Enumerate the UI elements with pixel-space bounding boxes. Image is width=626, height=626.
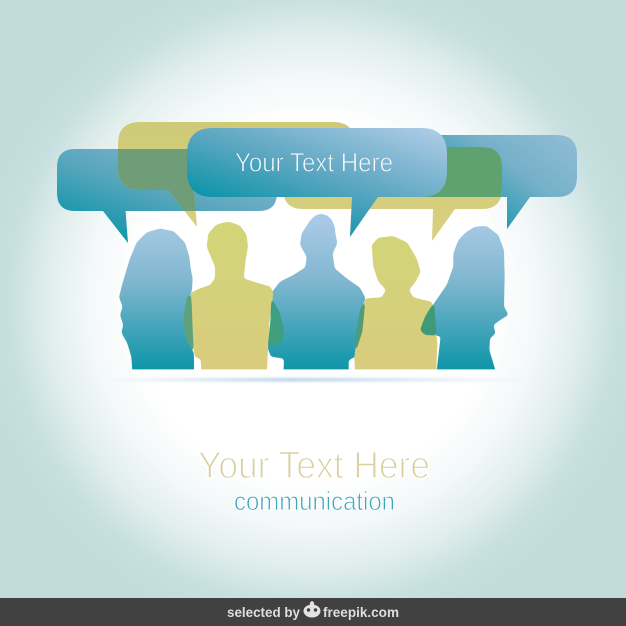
speech bubble: left blue (57, 149, 277, 243)
overlap: arm 3 (354, 303, 365, 348)
icon: freepik logo (304, 601, 320, 618)
footer text: selected by: selected by (227, 604, 300, 620)
overlap: right bubbles (422, 147, 502, 197)
speech bubble: back olive right (283, 147, 502, 241)
person: woman left (119, 228, 194, 377)
footer bar (0, 598, 626, 626)
person: woman olive (354, 236, 437, 377)
bubble text: Your Text Here (235, 148, 393, 178)
ground shadow (100, 378, 530, 382)
speech bubble: main front (187, 128, 447, 237)
footer text: freepik.com: freepik.com (323, 604, 399, 620)
person: man centre blue (267, 214, 366, 377)
person: woman right (432, 226, 508, 370)
overlap: arm 4 (420, 305, 436, 336)
speech bubble: right blue (380, 135, 577, 229)
people silhouettes (119, 214, 509, 377)
overlap: left bubbles (118, 149, 196, 211)
overlap: arm 1 (184, 296, 194, 350)
overlap: arm 2 (268, 301, 284, 346)
person: man olive (190, 222, 273, 377)
speech bubble: back olive left (118, 122, 355, 227)
subheading: communication (234, 486, 395, 516)
heading: Your Text Here (198, 445, 430, 487)
